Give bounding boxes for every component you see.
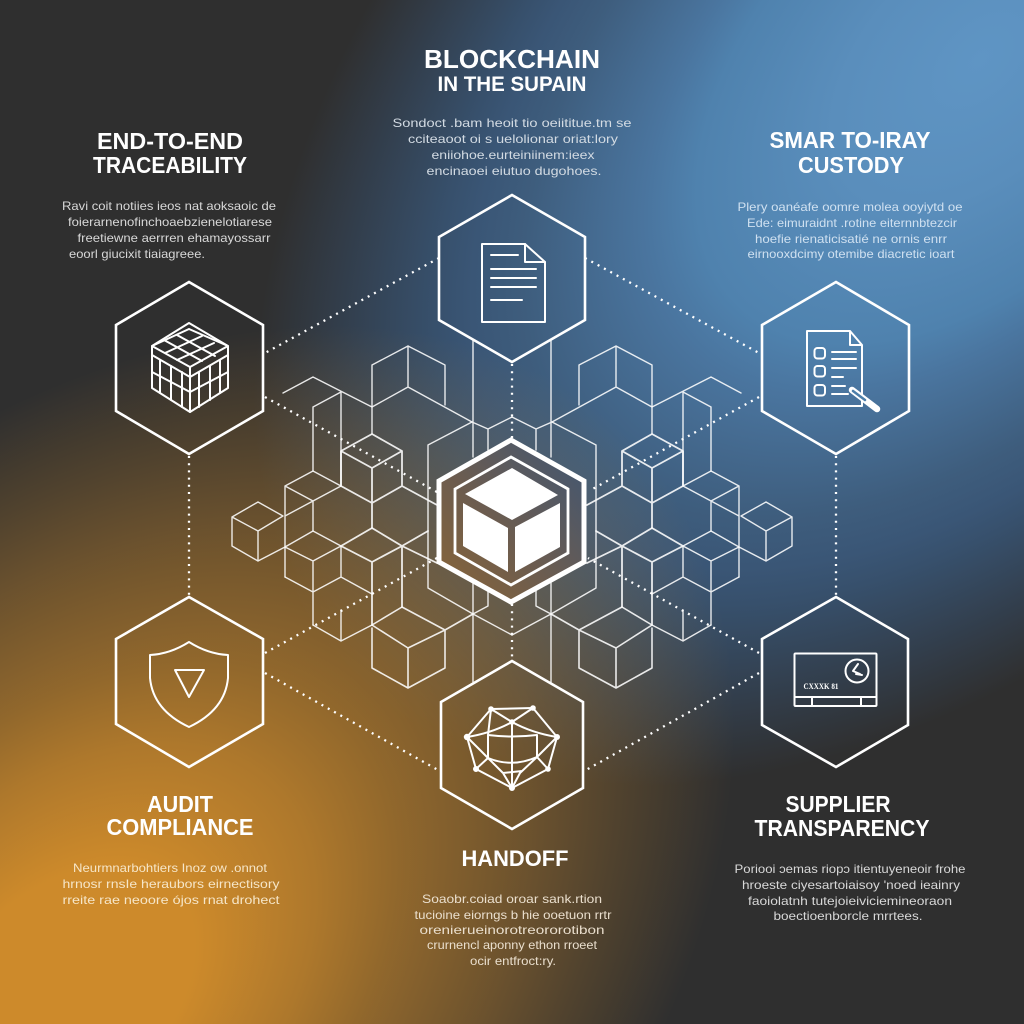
node: polyhedron (bottom centre) <box>441 661 583 829</box>
text block: end-to-end traceability: Ravi coit notiies ieos nat aoksaoic de <box>62 199 276 213</box>
icon: card terminal: CXXXK 81 <box>804 682 838 691</box>
text block: smart custody: Ede: eimuraidnt .rotine eiternnbtezcir <box>747 216 957 230</box>
icon: polyhedron <box>465 706 559 790</box>
text block: supplier transparency: Poriooi ɔemas riopɔ itientuyeneoir frohe <box>734 862 966 876</box>
text block: smart custody: eirnooxdcimy otemibe diacretic ioart <box>748 247 955 261</box>
heading: smart custody: SMAR TO-IRAY <box>770 127 930 153</box>
text block: supplier transparency: faoiolatnh tutejoieiviciemineoraon <box>748 894 952 908</box>
text block: audit compliance: Neurmnarbohtiers Inoz ow .onnot <box>73 861 268 875</box>
text block: audit compliance <box>62 861 280 907</box>
icon: grid cube <box>152 323 228 412</box>
heading: supplier transparency: TRANSPARENCY <box>754 815 930 841</box>
text block: supplier transparency: hroeste ciyesartoiaisoy 'noed ieainry <box>742 878 960 892</box>
node: shield (bottom left) <box>116 597 263 767</box>
text block: audit compliance: rreite rae neoore ójos rnat drohect <box>62 893 280 907</box>
text block: smart custody: Plery oanéafe oomre molea ooyiytd oe <box>738 200 963 214</box>
text block: handoff <box>414 892 612 968</box>
heading: end-to-end traceability <box>93 128 247 178</box>
icon: shield <box>150 642 228 727</box>
text block: intro: eniiohoe.eurteiniinem:ieex <box>432 148 594 162</box>
heading: audit compliance: COMPLIANCE <box>106 814 254 840</box>
node: card terminal (bottom right) <box>762 597 908 767</box>
text block: end-to-end traceability: eoorl giucixit tiaiagreee. <box>69 247 205 261</box>
text block: supplier transparency: boectioenborcle mrrtees. <box>774 909 922 923</box>
text block: handoff: orenierueinorotreororotibon <box>420 923 604 937</box>
text block: intro <box>392 116 632 178</box>
heading: end-to-end traceability: END-TO-END <box>97 128 243 154</box>
title <box>424 44 600 96</box>
heading: supplier transparency: SUPPLIER <box>786 791 891 817</box>
node: cube grid (left) <box>116 282 263 454</box>
heading: smart custody: CUSTODY <box>798 152 904 178</box>
dotted connectors <box>189 258 836 770</box>
icon: checklist <box>807 331 877 409</box>
node: document (top) <box>439 195 585 362</box>
text block: intro: Sondoct .bam heoit tio oeiititue.tm se <box>392 116 632 130</box>
text block: smart custody <box>738 200 963 261</box>
title: BLOCKCHAIN <box>424 44 600 74</box>
text block: audit compliance: hrnosr rnsIe heraubors eirnectisory <box>62 877 280 891</box>
text block: supplier transparency <box>734 862 966 923</box>
title: IN THE SUPAIN <box>438 73 586 96</box>
text block: handoff: crurnencl aponny ethon rroeet <box>427 938 598 952</box>
text block: smart custody: hoefie rienaticisatié ne ornis enrr <box>755 232 947 246</box>
cube network: left half <box>232 340 512 688</box>
cube network: right half <box>512 340 792 688</box>
central hexagon with cube <box>439 440 584 602</box>
icon: document <box>482 244 545 322</box>
heading: audit compliance: AUDIT <box>147 791 213 817</box>
text block: handoff: ocir entfroct:ry. <box>470 954 556 968</box>
node: checklist (right) <box>762 282 909 454</box>
heading: smart custody <box>770 127 930 178</box>
text block: handoff: tucioine eiorngs b hie ooetuon rrtr <box>414 908 612 922</box>
text block: end-to-end traceability: freetiewne aerrren ehamayossarr <box>78 231 271 245</box>
text block: end-to-end traceability: foierarnenofinchoaebzienelotiarese <box>68 215 272 229</box>
text block: intro: cciteaoot oi s uelolionar oriat:lory <box>408 132 618 146</box>
text block: end-to-end traceability <box>62 199 276 261</box>
text block: handoff: Soaobr.coiad oroar sank.rtion <box>422 892 602 906</box>
heading: end-to-end traceability: TRACEABILITY <box>93 152 247 178</box>
icon: card terminal <box>794 654 876 706</box>
heading: handoff: HANDOFF <box>462 846 568 871</box>
heading: audit compliance <box>106 791 254 840</box>
text block: intro: encinaoei eiutuo dugohoes. <box>426 164 602 178</box>
heading: supplier transparency <box>754 791 930 841</box>
icon: white cube <box>463 468 560 572</box>
